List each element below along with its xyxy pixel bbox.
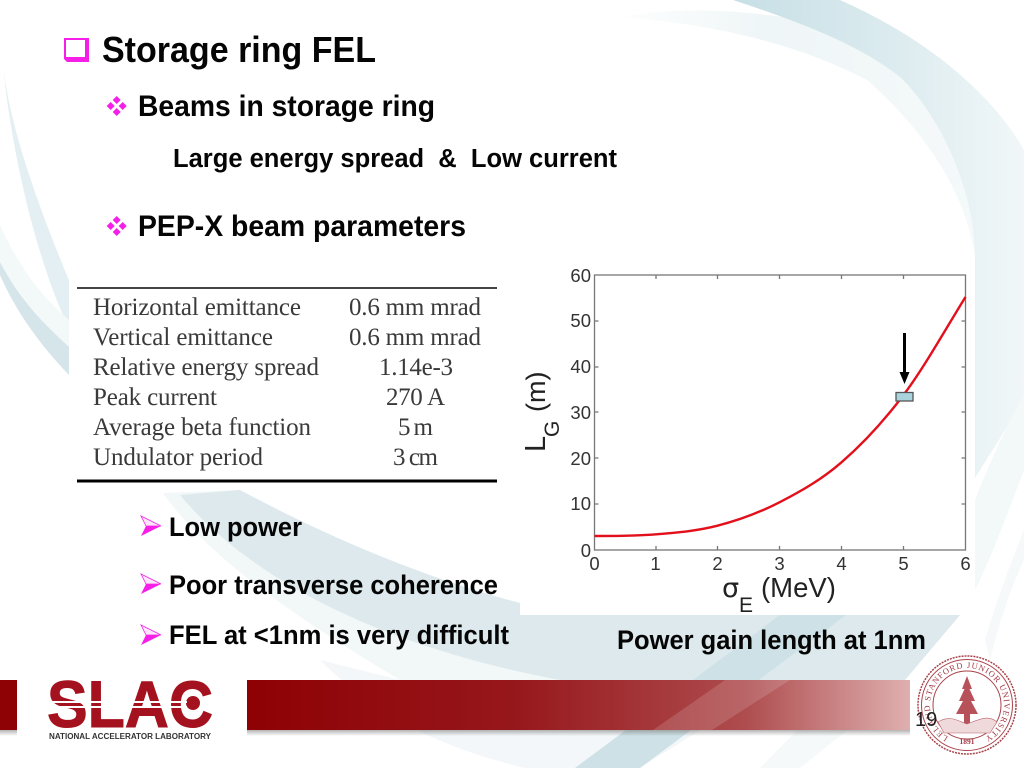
icon: diamonds bullet (107, 216, 127, 236)
footer bar: left stub (0, 680, 17, 736)
table: beam parameters: 270 A (386, 384, 445, 411)
chart: power gain length vs energy spread (520, 265, 971, 617)
x axis numbers: 0 (589, 553, 600, 574)
background swoosh: bottom (163, 490, 960, 768)
table: beam parameters: Average beta function (93, 414, 312, 441)
icon: hollow square bullet (64, 38, 89, 62)
table: beam parameters: Peak current (93, 384, 217, 411)
logo: SLAC: NATIONAL ACCELERATOR LABORATORY (49, 732, 212, 741)
table: beam parameters: Vertical emittance (93, 324, 273, 351)
x axis label: σ (722, 573, 739, 604)
table: beam parameters: 0.6 mm mrad (349, 294, 482, 321)
y axis label (520, 372, 564, 452)
y axis numbers: 50 (570, 310, 591, 331)
red curve (594, 297, 966, 536)
white backing: plot (520, 258, 975, 615)
x axis label (722, 572, 836, 617)
heading: Storage ring FEL: Storage ring FEL (102, 29, 376, 70)
y axis numbers: 0 (581, 540, 591, 561)
footer bar: main (247, 680, 910, 736)
plot frame and ticks (594, 275, 966, 550)
x axis label: (MeV) (761, 572, 836, 603)
marker box (896, 392, 913, 401)
bullet: Low power: Low power (169, 512, 302, 542)
background swoosh: top right (620, 0, 1024, 660)
logo: Stanford seal: 1891 (960, 737, 975, 746)
x axis numbers: 1 (650, 553, 661, 574)
icon: arrow bullet (141, 625, 161, 645)
y axis label: L (520, 436, 552, 452)
icon: arrow bullet (141, 574, 161, 594)
hills (938, 718, 997, 733)
slide number: 19 (915, 709, 937, 731)
table: beam parameters: 5 m (398, 414, 434, 441)
bullet: Beams in storage ring: Beams in storage ring (138, 90, 435, 123)
tree (956, 676, 978, 730)
icon: arrow bullet (141, 516, 161, 536)
bullet: Poor transverse coherence: Poor transverse coherence (169, 570, 498, 600)
logo: Stanford seal: LELAND STANFORD JUNIOR UNIVERSITY (924, 662, 1010, 742)
x axis numbers: 3 (774, 553, 785, 574)
icon: diamonds bullet (107, 96, 127, 116)
y axis numbers: 60 (570, 265, 591, 286)
bullet: PEP-X beam parameters: PEP-X beam parameters (138, 210, 466, 243)
y axis numbers: 10 (570, 493, 591, 514)
white backing: table (69, 281, 498, 490)
y axis label: (m) (521, 372, 551, 412)
table: beam parameters: 1.14e-3 (379, 354, 453, 381)
table: beam parameters: Undulator period (93, 444, 264, 471)
x axis label: E (739, 594, 753, 617)
x axis numbers: 5 (898, 553, 909, 574)
table: beam parameters: 0.6 mm mrad (349, 324, 482, 351)
arrow (900, 333, 910, 384)
x axis numbers: 2 (712, 553, 723, 574)
y axis numbers: 20 (570, 448, 591, 469)
bullet: FEL at <1nm is very difficult: FEL at <1nm is very difficult (169, 620, 509, 650)
table: beam parameters: Horizontal emittance (93, 294, 301, 321)
y axis numbers: 40 (570, 356, 591, 377)
text: Large energy spread and Low current: Large energy spread & Low current (173, 143, 617, 173)
table: beam parameters: Relative energy spread (93, 354, 320, 381)
y axis numbers: 30 (570, 402, 591, 423)
logo: SLAC: SLAC (47, 667, 213, 741)
background swoosh: left (0, 65, 70, 375)
x axis numbers: 6 (960, 553, 971, 574)
x axis numbers (589, 553, 971, 574)
caption: Power gain length at 1nm: Power gain length at 1nm (617, 625, 926, 655)
table: beam parameters: 3 cm (393, 444, 439, 471)
y axis numbers (570, 265, 591, 561)
table: beam parameters (77, 287, 497, 482)
y axis label: G (541, 421, 564, 437)
x axis numbers: 4 (836, 553, 847, 574)
